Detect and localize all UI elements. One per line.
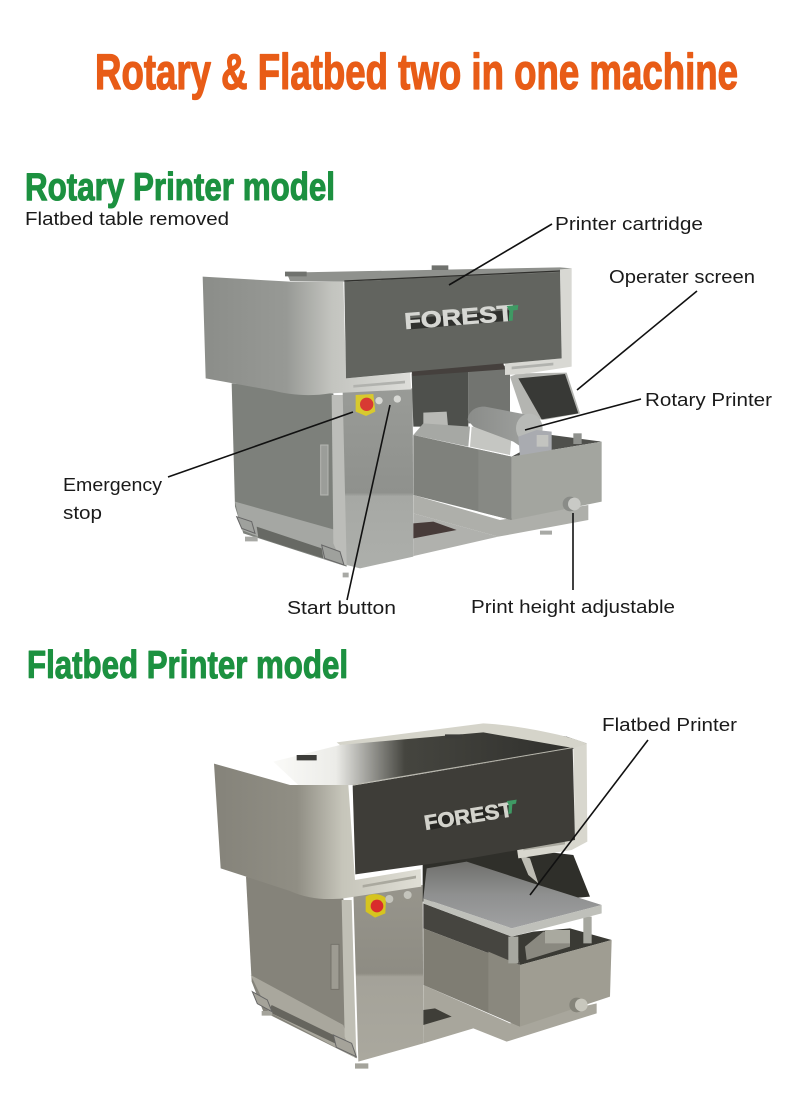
table legs — [508, 917, 592, 963]
emergency stop button — [356, 394, 401, 416]
label: printer cartridge: Printer cartridge — [555, 214, 703, 234]
front column — [343, 388, 413, 568]
left side cabinet — [232, 383, 347, 567]
screen — [510, 373, 580, 420]
subheading: flatbed table removed: Flatbed table removed — [25, 209, 229, 229]
mechanism — [512, 435, 602, 457]
label: rotary printer: Rotary Printer — [645, 390, 772, 410]
logo: forest: FOREST — [403, 299, 515, 334]
interior shadow — [423, 848, 590, 902]
heading: flatbed printer model: Flatbed Printer model — [27, 644, 348, 687]
top lid strip — [287, 267, 572, 282]
label: start button: Start button — [287, 598, 396, 618]
interior — [412, 370, 468, 427]
label: operater screen: Operater screen — [609, 267, 755, 287]
label: print height adjustable: Print height adjustable — [471, 597, 675, 617]
rotary roller — [468, 407, 542, 448]
heading: rotary printer model: Rotary Printer model — [25, 166, 335, 209]
label: emergency stop: stop — [63, 503, 102, 523]
top lid — [273, 724, 587, 787]
callout line: start button — [347, 405, 390, 600]
height knob — [569, 998, 584, 1012]
front dark panel — [344, 272, 562, 378]
label: emergency stop: Emergency — [63, 475, 162, 495]
callout line: emergency stop — [168, 412, 353, 477]
mechanism — [423, 903, 520, 965]
front dark panel — [353, 748, 575, 874]
top housing — [214, 764, 421, 899]
illustration: rotary printer machine — [203, 265, 602, 577]
callout line: operater screen — [577, 291, 697, 390]
callout line: flatbed printer — [530, 740, 648, 895]
drawer left face — [423, 928, 520, 1027]
front column — [353, 885, 423, 1062]
base plate — [423, 985, 597, 1043]
base plate — [413, 495, 588, 537]
drawer right face — [520, 940, 612, 1027]
emergency stop button — [366, 891, 412, 918]
callout line: printer cartridge — [449, 224, 552, 285]
height knob — [563, 497, 577, 511]
logo: forest: FOREST — [423, 798, 515, 835]
drawer left face — [413, 435, 512, 520]
callout line: rotary printer — [525, 399, 641, 430]
flatbed table — [423, 862, 602, 937]
callout line: print height adjustable — [572, 513, 574, 590]
left side cabinet — [246, 877, 357, 1058]
drawer right face — [512, 442, 602, 520]
label: flatbed printer: Flatbed Printer — [602, 715, 737, 735]
illustration: flatbed printer machine — [214, 723, 612, 1069]
top housing — [203, 277, 411, 395]
